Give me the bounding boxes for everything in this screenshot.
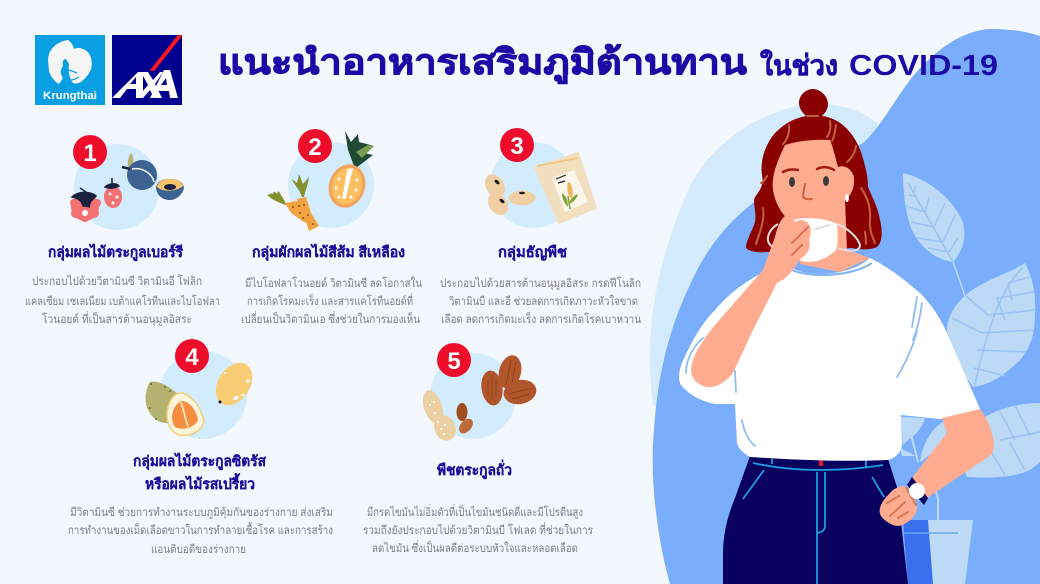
icon: beans and grain bag xyxy=(481,142,596,228)
panel: berries xyxy=(25,135,220,326)
text: orange and yellow vegetables xyxy=(241,276,422,326)
neck and face xyxy=(773,140,870,272)
shirt xyxy=(679,258,980,461)
face mask xyxy=(768,218,860,262)
heading: citrus: หรือผลไม้รสเปรี้ยว xyxy=(145,473,255,493)
panel: nuts xyxy=(363,343,593,555)
badge 2: 2 xyxy=(308,134,322,161)
raised arm and hand xyxy=(691,216,811,387)
heading: citrus xyxy=(133,452,266,493)
pants xyxy=(723,456,908,584)
title: COVID-19 xyxy=(849,50,998,82)
panel: grains xyxy=(440,128,641,326)
face details xyxy=(783,167,849,202)
right arm and hand xyxy=(880,409,994,526)
text: citrus: แอนติบอดีของร่างกาย xyxy=(151,543,246,556)
text: orange and yellow vegetables: การเกิดโรคมะเร็ง และสารแคโรทีนอยด์ที่ xyxy=(247,293,413,308)
title xyxy=(218,43,998,84)
icon: carrot and pineapple xyxy=(267,131,374,231)
background: blue blob xyxy=(653,29,1040,584)
text: citrus: มีวิตามินซี ช่วยการทำงานระบบภูมิคุ้มกันของร่างกาย ส่งเสริม xyxy=(70,506,333,519)
text: grains xyxy=(440,276,641,326)
heading: nuts: พืชตระกูลถั่ว xyxy=(437,459,512,479)
text: nuts: ลดไขมัน ซึ่งเป็นผลดีต่อระบบหัวใจและหลอดเลือด xyxy=(372,540,578,555)
text: grains: เลือด ลดการเกิดมะเร็ง ลดการเกิดโรคเบาหวาน xyxy=(441,311,641,326)
badge 5 xyxy=(437,343,471,377)
badge 5: 5 xyxy=(447,348,461,375)
wristwatch xyxy=(907,477,928,505)
text: nuts xyxy=(363,504,593,555)
logo: Krungthai: Krungthai xyxy=(43,90,97,102)
icon: nuts xyxy=(419,353,539,444)
text: berries xyxy=(25,274,220,326)
hair xyxy=(746,89,882,252)
icon: pomelo and lemon xyxy=(145,351,260,439)
badge 4: 4 xyxy=(185,344,199,371)
heading: orange and yellow vegetables: กลุ่มผักผลไม้สีส้ม สีเหลือง xyxy=(252,243,405,261)
badge 2 xyxy=(298,129,332,163)
illustration: woman with mask xyxy=(679,89,994,584)
badge 3 xyxy=(500,128,534,162)
heading: citrus: กลุ่มผลไม้ตระกูลซิตรัส xyxy=(133,452,266,470)
text: berries: แคลเซียม เซเลเนียม เบต้าแคโรทีนและไบโอฟลา xyxy=(25,294,220,308)
text: grains: ประกอบไปด้วยสารต้านอนุมูลอิสระ กรดฟีโนลิก xyxy=(440,276,641,290)
panel: citrus xyxy=(68,339,333,556)
title: ในช่วง xyxy=(760,49,838,81)
badge 4 xyxy=(175,339,209,373)
text: citrus xyxy=(68,506,333,556)
text: berries: ประกอบไปด้วยวิตามินซี วิตามินอี โฟลิก xyxy=(32,274,202,288)
badge 3: 3 xyxy=(510,133,524,160)
icon: berries xyxy=(70,144,184,230)
logo: AXA xyxy=(112,35,182,105)
hair strands xyxy=(756,116,875,244)
title: แนะนำอาหารเสริมภูมิต้านทาน xyxy=(218,43,747,84)
text: nuts: มีกรดไขมันไม่อิ่มตัวที่เป็นไขมันชนิดดีและมีโปรตีนสูง xyxy=(367,504,583,519)
text: nuts: รวมถึงยังประกอบไปด้วยวิตามินบี โฟเลต ที่ช่วยในการ xyxy=(363,522,593,537)
heading: berries: กลุ่มผลไม้ตระกูลเบอร์รี xyxy=(48,243,183,261)
background: light blue arc xyxy=(650,104,880,420)
text: orange and yellow vegetables: มีไบโอฟลาโวนอยด์ วิตามินซี ลดโอกาสใน xyxy=(245,276,422,290)
text: orange and yellow vegetables: เปลี่ยนเป็นวิตามินเอ ซึ่งช่วยในการมองเห็น xyxy=(241,311,420,326)
text: citrus: การทำงานของเม็ดเลือดขาวในการทำลายเชื้อโรค และการสร้าง xyxy=(68,522,333,537)
text: grains: วิตามินบี และอี ช่วยลดการเกิดภาวะหัวใจขาด xyxy=(449,295,638,308)
illustration: plant with leaves xyxy=(900,173,1040,584)
heading: grains: กลุ่มธัญพืช xyxy=(498,244,567,261)
badge 1 xyxy=(73,135,107,169)
panel: orange and yellow vegetables xyxy=(241,129,422,326)
logo: Krungthai xyxy=(35,35,105,105)
badge 1: 1 xyxy=(83,140,97,167)
text: berries: โวนอยด์ ที่เป็นสารต้านอนุมูลอิสระ xyxy=(42,311,192,326)
